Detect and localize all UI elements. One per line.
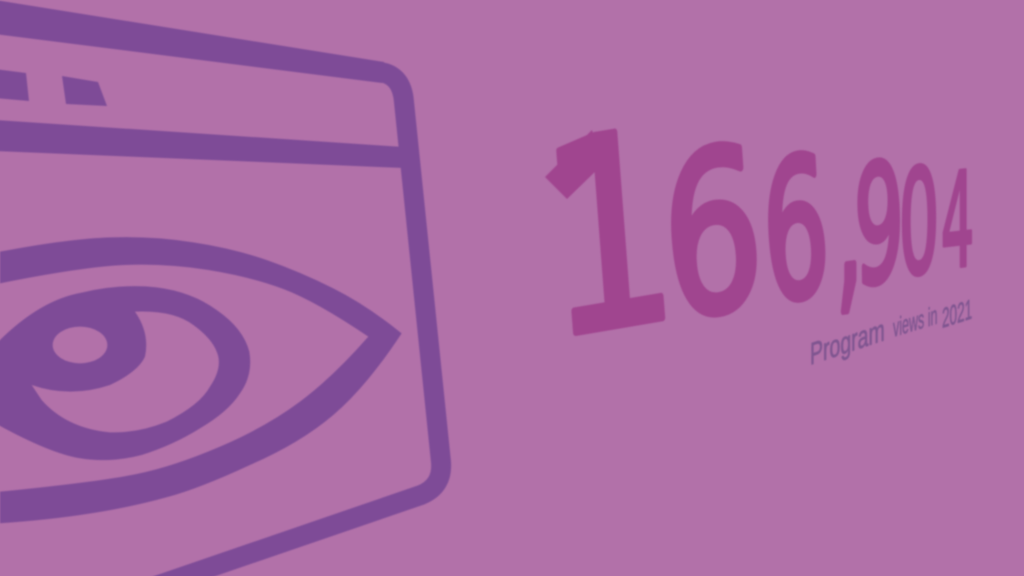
big number: 166,904: [532, 72, 974, 400]
caption: program views: views in: [893, 301, 937, 343]
big number: 166,904: 4: [941, 145, 974, 299]
digit one flag: [545, 130, 602, 199]
browser button dot 2: [62, 76, 107, 106]
caption: program views: Program: [810, 312, 885, 372]
big number: 166,904: 0: [899, 137, 939, 310]
browser window top edge: [0, 0, 384, 83]
eye iris and pupil: [0, 286, 250, 460]
big number: 166,904: 9: [853, 128, 905, 324]
eye outline: [0, 237, 402, 523]
big number: 166,904: 1: [532, 72, 686, 400]
browser title bar divider: [0, 120, 404, 168]
icon: browser window with eye: [0, 0, 441, 576]
browser window frame: [150, 72, 441, 576]
caption: program views: 2021: [942, 293, 972, 334]
big number: 166,904: 6: [758, 116, 834, 348]
big number: 166,904: ,: [836, 110, 863, 335]
big number: 166,904: 6: [655, 99, 771, 372]
caption: program views: [810, 293, 972, 372]
browser button dot 1: [0, 69, 29, 101]
